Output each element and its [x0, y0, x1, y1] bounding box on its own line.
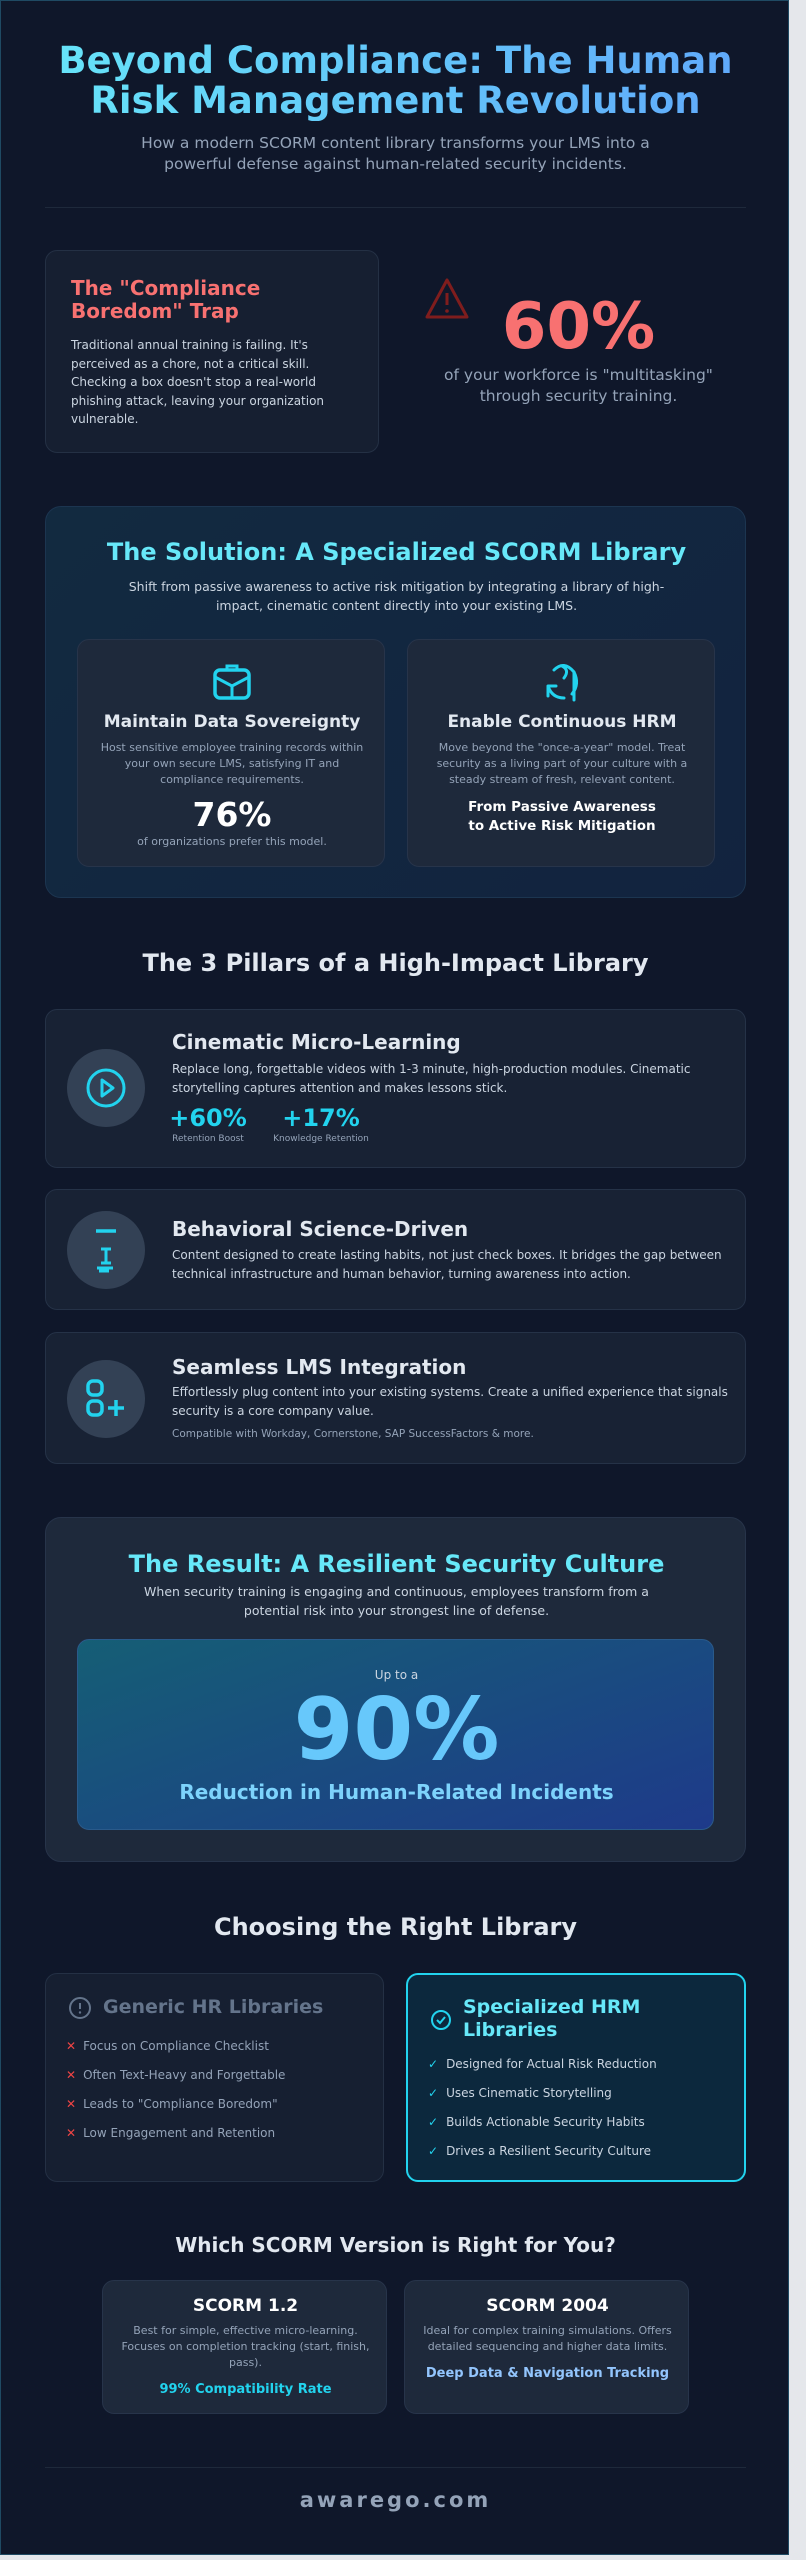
card: SCORM 2004 [404, 2280, 689, 2414]
stat +60%: +60% [169, 1104, 247, 1132]
trap heading: The "Compliance [71, 276, 260, 300]
stat caption [444, 366, 713, 405]
icon: play [67, 1049, 145, 1127]
list: ✓ Builds Actionable Security Habits [428, 2115, 645, 2129]
stat caption: through security training. [480, 387, 677, 405]
desc: Ideal for complex training simulations. Offers detailed sequencing and higher data limits. [423, 2324, 672, 2353]
panel: specialized HRM libraries [406, 1973, 746, 2182]
icon: behavior [67, 1211, 145, 1289]
pillar desc: Replace long, forgettable videos with 1-3 minute, high-production modules. Cinematic storytelling captures attention and makes lessons stick. [172, 1062, 690, 1095]
list [66, 2039, 285, 2140]
subtitle [141, 134, 650, 173]
pillar title: Seamless LMS Integration [172, 1355, 466, 1379]
trap body text: Traditional annual training is failing. It's perceived as a chore, not a critical skill. Checking a box doesn't stop a real-world phishing attack, leaving your organization vulnerable. [71, 338, 324, 426]
icon: alert circle [69, 1997, 91, 2019]
stat caption: Reduction in Human-Related Incidents [179, 1780, 614, 1804]
panel: result [45, 1517, 746, 1862]
icon: briefcase shield [213, 664, 251, 700]
card desc: Host sensitive employee training records within your own secure LMS, satisfying IT and compliance requirements. [101, 741, 363, 786]
panel: pillar 2 [45, 1189, 746, 1310]
icon: warning [426, 278, 468, 318]
stat caption: of your workforce is "multitasking" [444, 366, 713, 384]
stat +60%: Retention Boost [172, 1134, 244, 1144]
title [1, 41, 790, 121]
footer: brand: awarego.com [300, 2488, 491, 2512]
highlight: Deep Data & Navigation Tracking [426, 2366, 669, 2381]
card: data sovereignty [77, 639, 385, 867]
title: Risk Management Revolution [90, 79, 701, 122]
subtitle: How a modern SCORM content library transforms your LMS into a [141, 134, 650, 152]
stat +17%: Knowledge Retention [273, 1134, 369, 1144]
title: SCORM 2004 [486, 2296, 609, 2316]
list: ✕ Often Text-Heavy and Forgettable [66, 2068, 285, 2082]
stat 76%: 76% [192, 795, 272, 834]
pillar title: Behavioral Science-Driven [172, 1217, 468, 1241]
subtitle: powerful defense against human-related security incidents. [164, 155, 627, 173]
panel: pillar 3 [45, 1332, 746, 1464]
trap heading [71, 276, 260, 323]
pillar desc: Content designed to create lasting habits, not just check boxes. It bridges the gap between technical infrastructure and human behavior, turning awareness into action. [172, 1248, 722, 1281]
panel: pillar 1 [45, 1009, 746, 1168]
solution subtitle: Shift from passive awareness to active risk mitigation by integrating a library of high-impact, cinematic content directly into your existing LMS. [129, 579, 664, 613]
heading: Specialized HRM [463, 1996, 640, 2018]
heading: Libraries [463, 2019, 558, 2041]
list [428, 2057, 657, 2158]
card: SCORM 1.2 [102, 2280, 387, 2414]
compatibility note: Compatible with Workday, Cornerstone, SAP SuccessFactors & more. [172, 1428, 534, 1440]
heading: pillars: The 3 Pillars of a High-Impact Library [142, 949, 649, 977]
callout [468, 799, 656, 834]
heading: SCORM version: Which SCORM Version is Right for You? [175, 2233, 616, 2257]
card title: Maintain Data Sovereignty [104, 712, 360, 732]
icon: integration [67, 1360, 145, 1438]
stat caption: of organizations prefer this model. [137, 835, 327, 848]
title: Beyond Compliance: The Human [58, 39, 733, 82]
result subtitle: When security training is engaging and continuous, employees transform from a potential risk into your strongest line of defense. [144, 1584, 649, 1618]
icon: cycle arrow [546, 664, 578, 702]
stat +17%: +17% [282, 1104, 360, 1132]
big stat box [77, 1639, 714, 1830]
up to a: Up to a [375, 1668, 418, 1682]
solution heading: The Solution: A Specialized SCORM Library [107, 538, 686, 566]
card title: Enable Continuous HRM [447, 712, 677, 732]
panel: compliance boredom trap [45, 250, 379, 453]
heading: choosing: Choosing the Right Library [214, 1913, 577, 1941]
list: ✓ Uses Cinematic Storytelling [428, 2086, 612, 2100]
result heading: The Result: A Resilient Security Culture [129, 1550, 664, 1578]
callout: From Passive Awareness [468, 799, 656, 815]
panel: solution [45, 506, 746, 898]
stat 90%: 90% [294, 1680, 499, 1780]
stat: 60%: 60% [502, 290, 655, 364]
list: ✕ Low Engagement and Retention [66, 2126, 275, 2140]
trap heading: Boredom" Trap [71, 299, 239, 323]
pillar title: Cinematic Micro-Learning [172, 1030, 461, 1054]
heading [463, 1996, 640, 2041]
highlight: 99% Compatibility Rate [159, 2382, 332, 2397]
list: ✓ Designed for Actual Risk Reduction [428, 2057, 657, 2071]
callout: to Active Risk Mitigation [468, 818, 656, 834]
list: ✕ Focus on Compliance Checklist [66, 2039, 269, 2053]
icon: check circle [431, 2010, 451, 2030]
stat +17% [273, 1104, 369, 1144]
card: continuous HRM [407, 639, 715, 867]
card desc: Move beyond the "once-a-year" model. Treat security as a living part of your culture with a steady stream of fresh, relevant content. [437, 741, 687, 786]
desc: Best for simple, effective micro-learning. Focuses on completion tracking (start, finish, pass). [121, 2324, 370, 2369]
pillar desc: Effortlessly plug content into your existing systems. Create a unified experience that signals security is a core company value. [172, 1385, 728, 1418]
list: ✕ Leads to "Compliance Boredom" [66, 2097, 278, 2111]
heading: Generic HR Libraries [103, 1996, 323, 2018]
list: ✓ Drives a Resilient Security Culture [428, 2144, 651, 2158]
panel: generic HR libraries [45, 1973, 384, 2182]
title: SCORM 1.2 [193, 2296, 298, 2316]
